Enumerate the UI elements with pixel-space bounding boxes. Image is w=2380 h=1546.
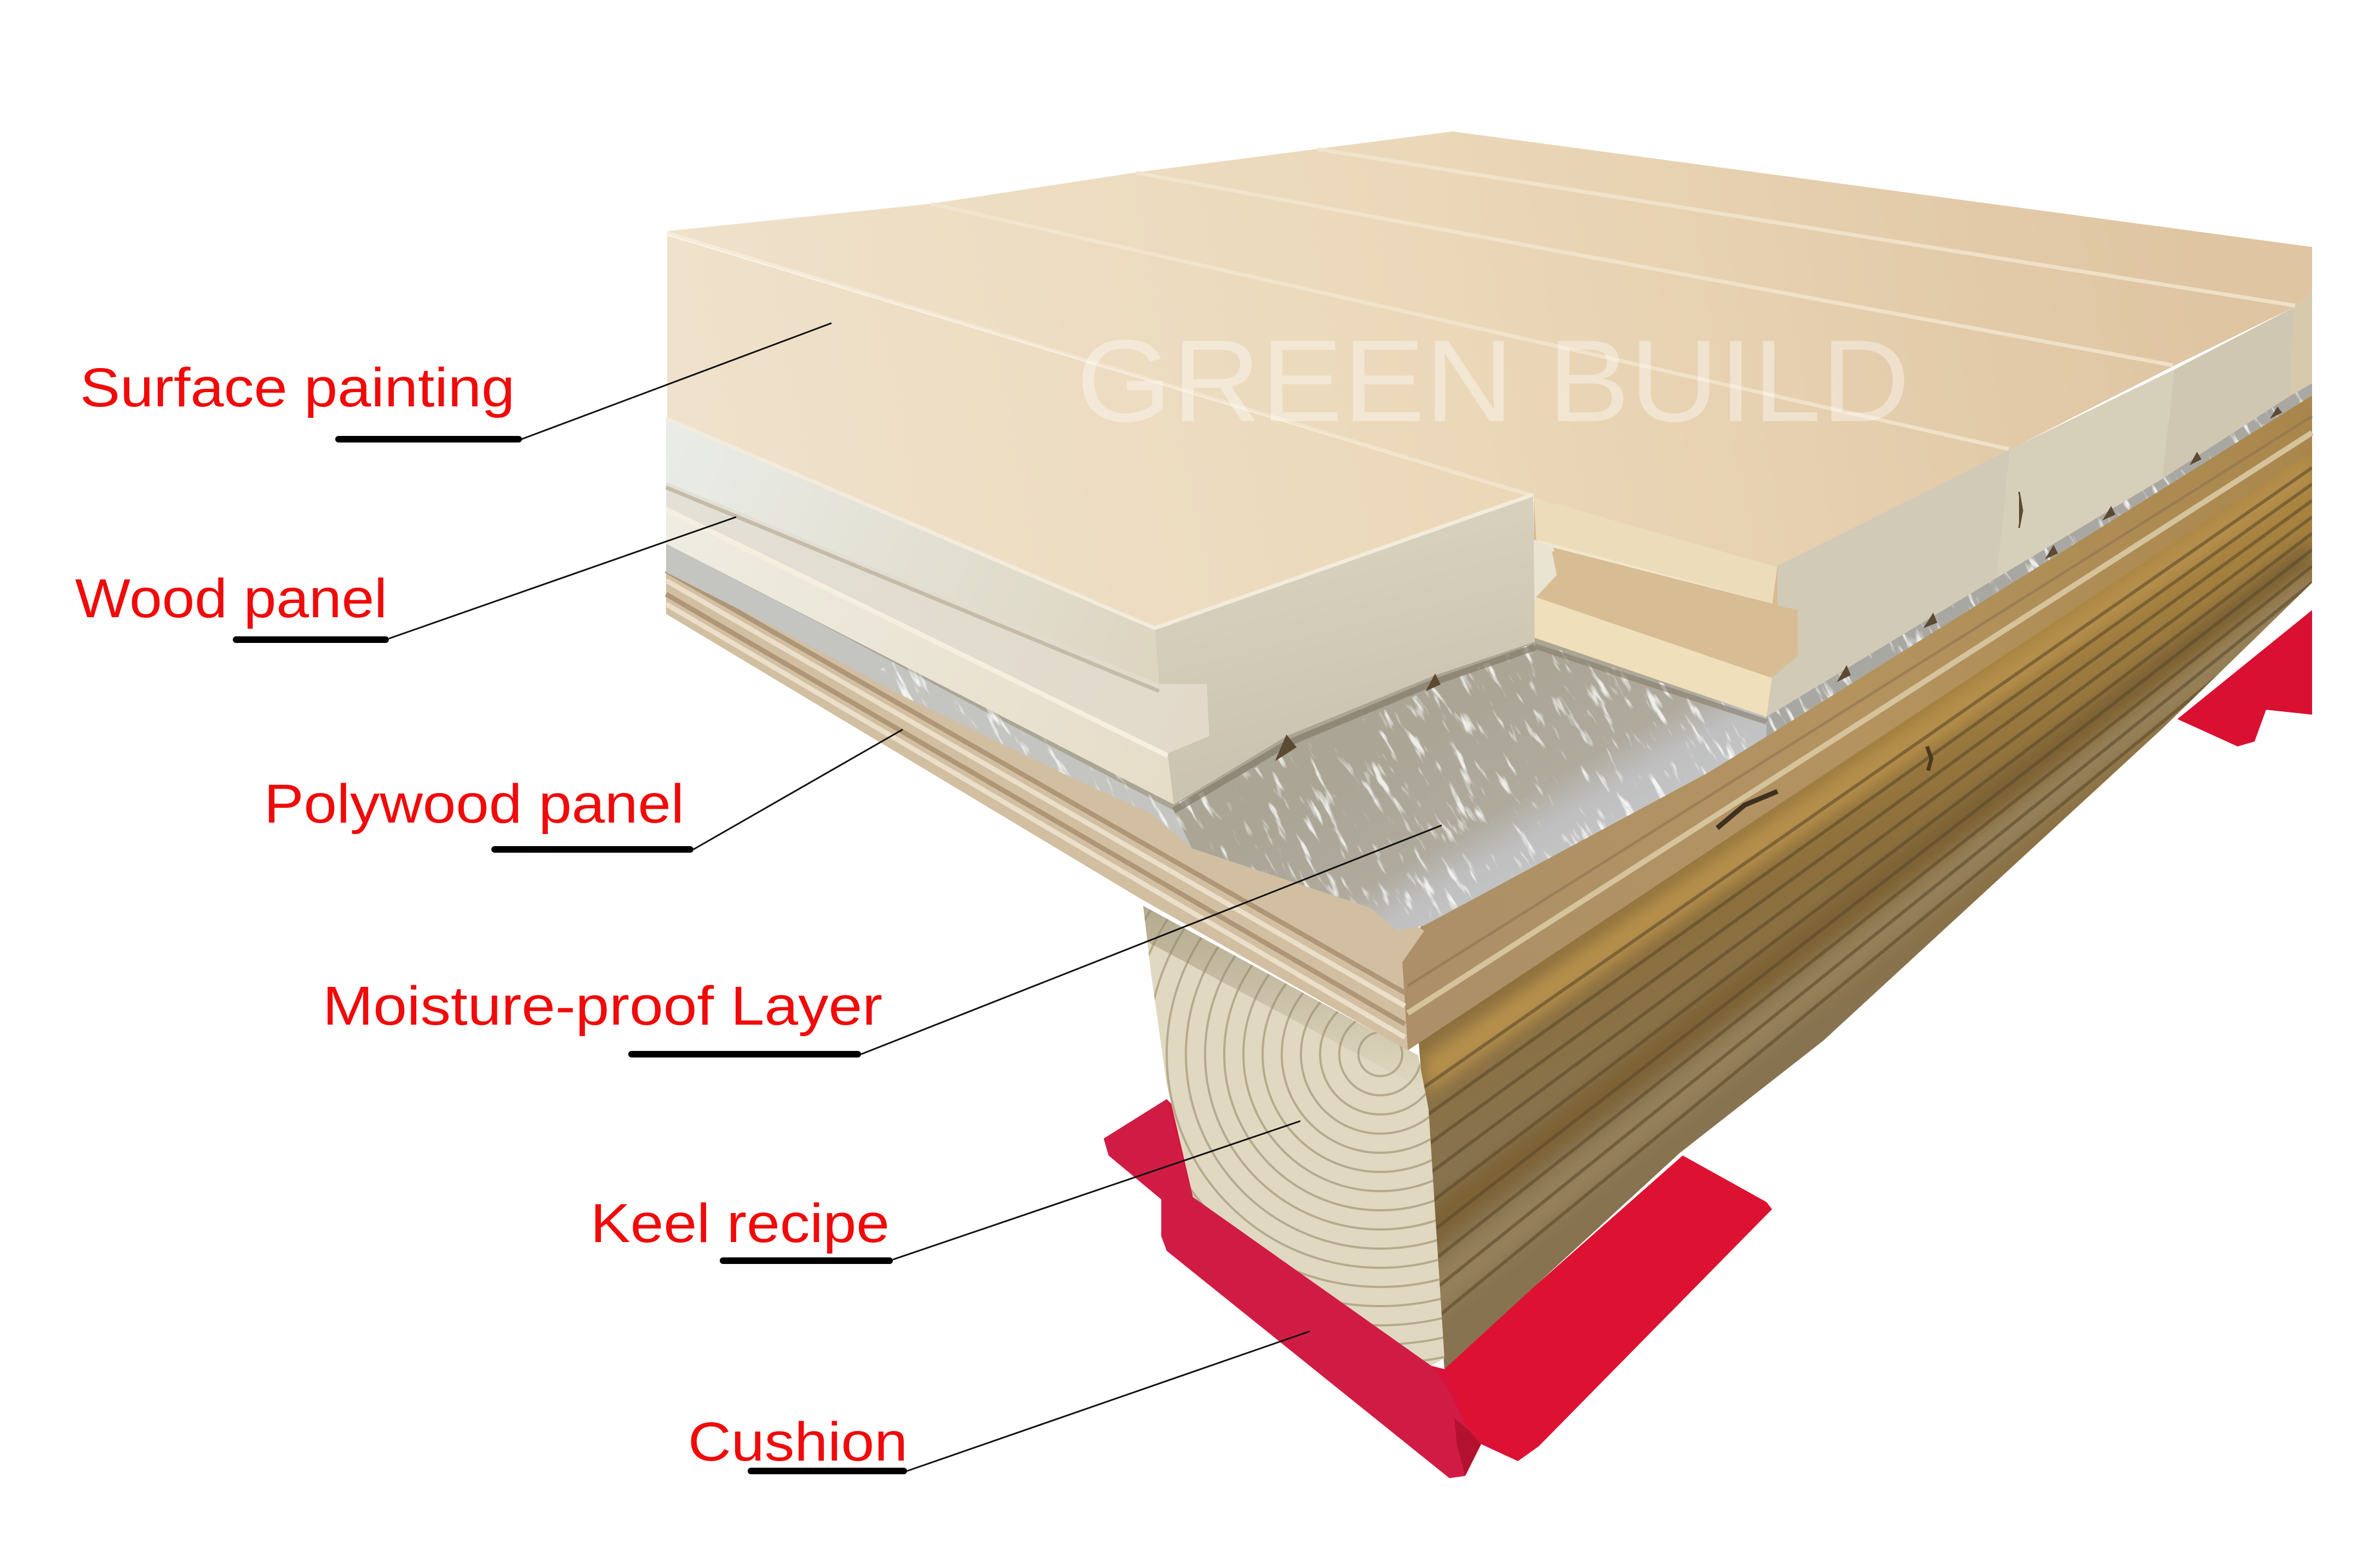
label: Wood panel: Wood panel — [75, 568, 387, 629]
label: Moisture-proof Layer — [323, 825, 1442, 1054]
label: Surface painting — [80, 323, 831, 439]
board 1 side lower lip — [666, 507, 1174, 804]
board 5 end face — [2289, 293, 2312, 396]
board 2 light lip — [1536, 539, 1775, 612]
front red cushion — [1104, 1099, 1772, 1478]
label: Cushion: Cushion — [688, 1411, 908, 1473]
label: Surface painting: Surface painting — [80, 357, 515, 418]
plywood panel — [666, 361, 2312, 1050]
label: Cushion — [688, 1331, 1310, 1473]
board 2 backing between tongue and groove — [1534, 493, 1798, 717]
board 2 top — [667, 204, 2009, 567]
icon: notches — [1277, 408, 2281, 759]
board 5 top — [1317, 131, 2312, 307]
board 2 end face — [1767, 449, 2010, 717]
watermark: GREEN BUILD: GREEN BUILD — [1076, 316, 1910, 446]
label: Polywood panel — [264, 729, 903, 849]
board 1 top — [667, 235, 1532, 628]
board 3 top — [931, 173, 2173, 450]
wood panel boards — [666, 131, 2312, 804]
icon: plywood crack — [1717, 791, 1777, 828]
moisture-proof foil layer — [666, 373, 2312, 930]
keel beam side face — [1418, 438, 2312, 1369]
board 3 end face — [1996, 370, 2174, 578]
board 1 side groove band — [666, 482, 1209, 754]
board 2 tongue side upper — [1534, 497, 1777, 606]
keel end grain face — [1143, 906, 1444, 1366]
label: Keel recipe: Keel recipe — [590, 1193, 890, 1254]
board 1 side upper band — [666, 417, 1159, 684]
icon: rear red cushion — [2177, 610, 2312, 746]
icon: beam crack — [1927, 746, 1931, 771]
label: Wood panel — [75, 517, 736, 640]
board 4 top — [1135, 149, 2295, 366]
board 4 end face — [2163, 307, 2295, 479]
board 2 tongue side lower — [1534, 596, 1772, 717]
label: Moisture-proof Layer: Moisture-proof Layer — [323, 975, 882, 1037]
board 1 tongue bulge — [1534, 539, 1557, 600]
label: Polywood panel: Polywood panel — [264, 773, 684, 835]
board 2 groove — [1553, 548, 1798, 656]
board 1 end face — [1155, 495, 1535, 804]
label: Keel recipe — [590, 1121, 1300, 1261]
